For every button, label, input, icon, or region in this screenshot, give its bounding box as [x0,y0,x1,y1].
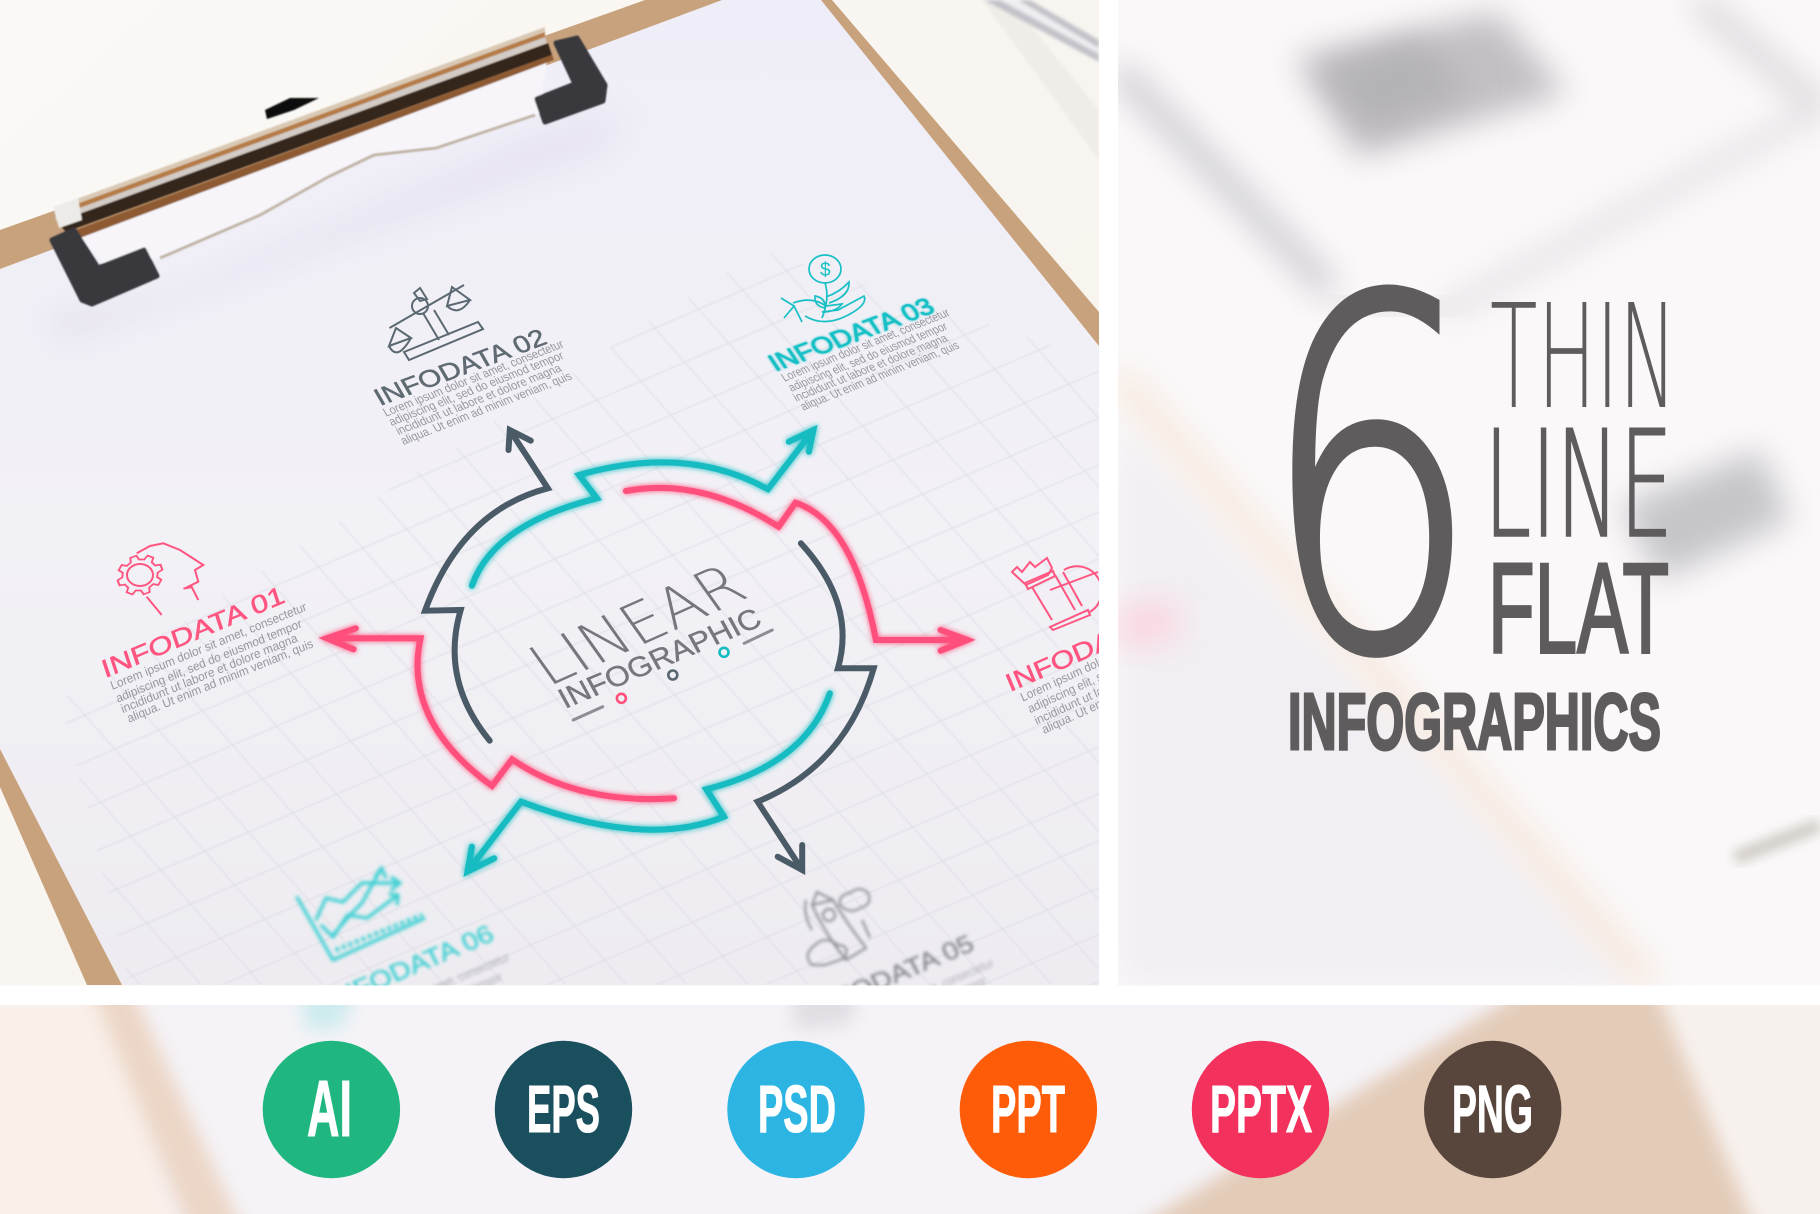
body text: aliqua. Ut enim ad minim veniam, quis [1040,642,1222,737]
clip shadow [520,145,564,160]
badge: PNG: PNG [1452,1072,1533,1147]
arrow: dark right-bottom [758,543,874,870]
clip cap right [537,38,605,122]
clip cap left [52,230,157,304]
LINEAR: LINEAR [516,552,759,699]
icon: money plant in hand [781,255,865,322]
dots [617,648,728,703]
panel: file formats [0,985,1820,1214]
infodata 04 [1006,556,1099,734]
dashes [573,630,772,720]
big number 6: 6 [1262,199,1479,761]
badge: PPT [960,1041,1097,1178]
badge: AI: AI [307,1064,352,1153]
clipboard board [0,0,1099,985]
body text [930,960,994,986]
badge: PNG [1424,1041,1561,1178]
body text: incididunt ut labore et dolore magna [393,361,564,438]
body text: adipiscing elit, sed do eiusmod tempor [337,970,504,1051]
body text: adipiscing elit, sed do eiusmod tempor [114,617,304,706]
icon: growth chart [297,868,425,960]
body text: Lorem ipsum dolor sit amet, consectetur [109,600,308,693]
arrow: pink left [327,628,674,799]
arrow: dark top-left [425,430,548,741]
body text: aliqua. Ut enim ad minim veniam, quis [398,369,574,448]
icon: chess rook with pie chart [1012,558,1102,630]
body text: Lorem ipsum dolor sit amet, consectetur [380,337,566,419]
heading: INFODATA 04 [1001,595,1186,698]
desk background [0,0,1099,986]
body text: Lorem ipsum dolor sit amet, consectetur [1018,606,1210,704]
arrow: cyan top [472,430,813,586]
infodata 06 [293,864,510,986]
body text: incididunt ut labore et dolore magna [119,631,300,716]
title block [1262,199,1677,766]
body text: adipiscing elit, sed do eiusmod tempor [821,974,988,1055]
icon: rocket with clouds [805,889,870,965]
icon: head with gear [112,543,203,615]
icon: money plant in hand: $ [820,260,831,281]
panel: blurred background with title [1118,0,1820,986]
infodata 03 [763,255,962,413]
FLAT: FLAT [1488,538,1669,680]
blurred photo background [0,985,1820,1214]
badge: PPTX [1192,1041,1329,1178]
badge: PPTX: PPTX [1210,1072,1312,1147]
badge: EPS: EPS [527,1072,600,1147]
infodata 05 [802,886,994,986]
heading: INFODATA 06 [322,920,498,1014]
body text: adipiscing elit, sed do eiusmod tempor [786,320,950,394]
arrow: cyan bottom [467,693,830,872]
badge: EPS [495,1041,632,1178]
arrow: pink right [626,488,967,651]
circular arrow diagram [327,430,967,872]
body text: Lorem ipsum dolor sit amet, consectetur [331,950,512,1037]
body text: incididunt ut labore et dolore magna [790,332,950,404]
panel: clipboard photo [0,0,1099,986]
body text: Lorem ipsum dolor sit amet, consectetur [815,956,996,1043]
infodata 01 [98,543,315,726]
badge: PSD [727,1041,865,1178]
grid on paper [60,250,1099,985]
LINE: LINE [1484,400,1673,571]
badge: PPT: PPT [991,1072,1065,1147]
paper sheet [0,0,1099,985]
body text: aliqua. Ut enim ad minim veniam, quis [797,339,962,413]
INFOGRAPHIC: INFOGRAPHIC [553,603,767,715]
heading: INFODATA 02 [369,324,552,411]
badge: AI [263,1041,400,1178]
clip handle [265,98,319,119]
center title [516,552,772,720]
body text: aliqua. Ut enim ad minim veniam, quis [125,637,315,726]
body text: adipiscing elit, sed do eiusmod tempor [1026,622,1208,716]
body text: incididunt ut labore et dolore magna [1032,638,1206,728]
body text [1020,658,1099,734]
icon: scales [389,285,483,360]
metal clip [52,27,605,304]
body text: adipiscing elit, sed do eiusmod tempor [386,349,566,429]
heading: INFODATA 05 [804,930,979,1023]
heading: INFODATA 03 [763,293,940,377]
badge: PSD: PSD [758,1072,836,1147]
body text: Lorem ipsum dolor sit amet, consectetur [779,306,952,384]
transparent clip pane top right [982,0,1099,160]
heading: INFODATA 01 [98,581,288,684]
body text [779,306,962,413]
blurred photo background [1118,0,1820,986]
infodata 02 [369,285,574,448]
